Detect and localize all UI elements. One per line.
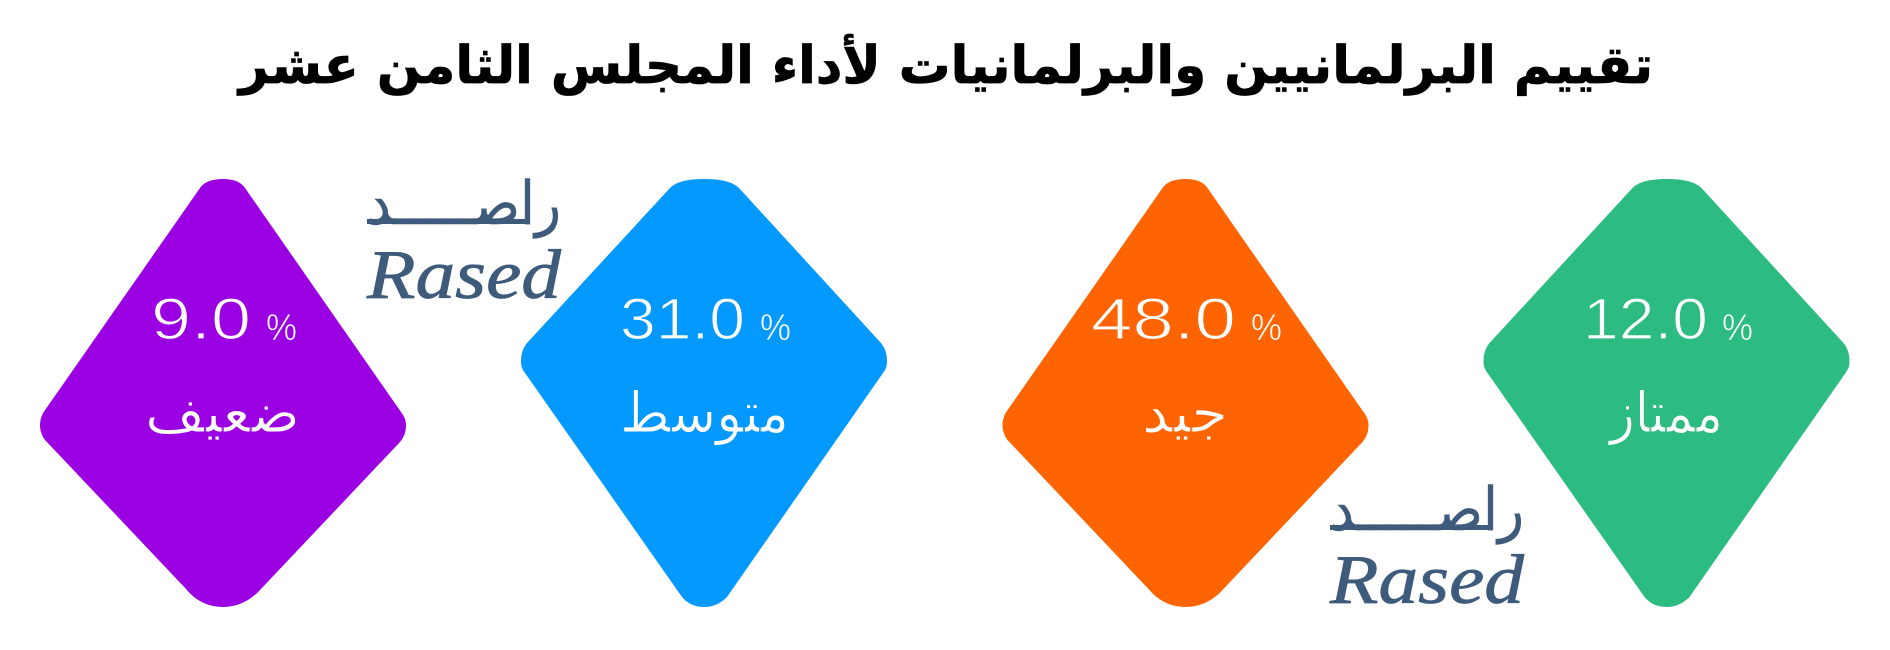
value: 12.0 (1583, 287, 1708, 352)
panel: good 48.0% (1002, 179, 1368, 607)
label: جيد (1142, 381, 1228, 446)
logo arabic wordmark: راصـــــد (1330, 475, 1524, 545)
value: 31.0 (620, 287, 745, 352)
label: ضعيف (145, 381, 300, 446)
diamond shape: green (1484, 179, 1850, 607)
label: متوسط (620, 381, 789, 446)
value: 9.0 (151, 287, 251, 352)
diamond shape: orange (1002, 179, 1368, 607)
panel: weak 9.0% (40, 179, 406, 607)
value: 48.0 (1091, 287, 1236, 352)
logo: Rased bottom (1329, 475, 1525, 619)
title: تقييم البرلمانيين والبرلمانيات لأداء المجلس الثامن عشر (236, 33, 1653, 96)
percent sign: % (266, 307, 297, 348)
logo latin wordmark: Rased (366, 237, 562, 314)
percent sign: % (760, 307, 791, 348)
logo arabic wordmark: راصـــــد (367, 169, 561, 239)
percent sign: % (1251, 307, 1282, 348)
diamond shape: purple (40, 179, 406, 607)
logo: Rased top (366, 169, 562, 314)
diamond shape: blue (521, 179, 887, 607)
panel: excellent 12.0% (1484, 179, 1850, 607)
panel: average 31.0% (521, 179, 887, 607)
percent sign: % (1722, 307, 1753, 348)
label: ممتاز (1607, 381, 1723, 446)
logo latin wordmark: Rased (1329, 542, 1525, 619)
